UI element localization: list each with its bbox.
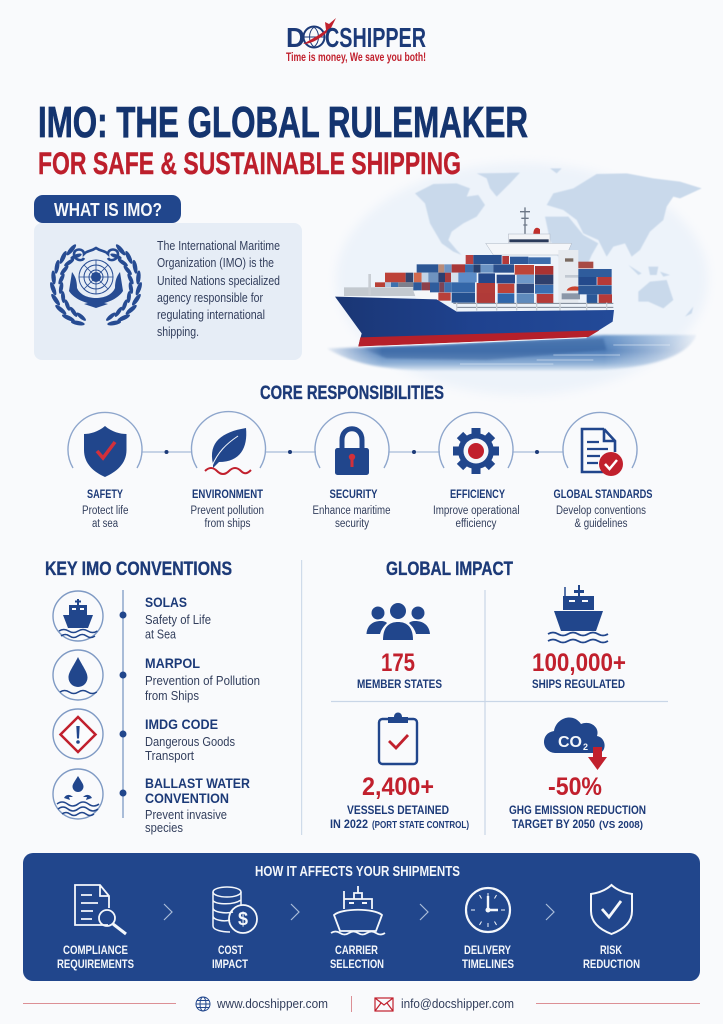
logo: DocShipper: D <box>286 22 305 53</box>
grid lines <box>331 590 668 835</box>
item: efficiency <box>433 412 520 530</box>
stat: member states: MEMBER STATES <box>357 677 442 691</box>
logo: DocShipper: CSHIPPER <box>325 22 426 53</box>
text block: description: The International Maritime <box>157 239 280 253</box>
item: carrier selection: SELECTION <box>330 957 384 971</box>
pill heading: WHAT IS IMO? <box>54 200 162 220</box>
item: cost impact: $ <box>238 909 248 929</box>
stat: member states: 175 <box>381 649 415 677</box>
icon: IMO emblem <box>49 243 143 326</box>
stat: member states <box>357 603 442 691</box>
item: security <box>312 412 390 530</box>
item: compliance requirements <box>57 885 134 971</box>
connectors between core icons <box>142 450 563 454</box>
convention: ballast water <box>53 769 250 835</box>
world map <box>415 168 702 317</box>
convention: SOLAS: SOLAS <box>145 594 187 610</box>
stat: GHG emission reduction: GHG EMISSION REDUCTION <box>509 803 646 817</box>
timeline <box>120 590 126 818</box>
convention: SOLAS <box>53 591 211 642</box>
item: carrier selection: CARRIER <box>335 943 378 957</box>
stat: GHG emission reduction <box>509 718 646 831</box>
section divider <box>301 560 302 835</box>
pill heading <box>34 195 181 223</box>
title: FOR SAFE & SUSTAINABLE SHIPPING <box>38 145 461 181</box>
arrow <box>420 904 428 920</box>
convention: IMDG code: Transport <box>145 749 194 763</box>
text block: description: Organization (IMO) is the <box>157 256 274 270</box>
stat: ships regulated: 100,000+ <box>532 649 626 677</box>
arrow <box>546 904 554 920</box>
convention: IMDG code <box>53 709 235 763</box>
item: safety <box>68 412 142 530</box>
item: efficiency: EFFICIENCY <box>450 487 505 501</box>
item: global standards: & guidelines <box>574 518 628 530</box>
icon: gear <box>453 428 499 474</box>
logo: DocShipper <box>286 18 426 64</box>
item: security: SECURITY <box>330 487 378 501</box>
panel: how it affects your shipments <box>23 853 700 981</box>
item: safety: Protect life <box>82 505 128 517</box>
stat: GHG emission reduction: -50% <box>548 773 602 801</box>
item: delivery timelines <box>462 888 514 971</box>
stat: vessels detained <box>330 712 469 831</box>
convention: IMDG code: IMDG CODE <box>145 716 218 732</box>
footer: info@docshipper.com <box>401 997 514 1011</box>
item: environment <box>190 412 266 530</box>
item: cost impact: COST <box>218 943 243 957</box>
stat: GHG emission reduction: 2 <box>583 742 588 752</box>
item: environment: from ships <box>204 518 251 530</box>
footer: www.docshipper.com <box>216 997 328 1011</box>
convention: MARPOL: Prevention of Pollution <box>145 674 260 688</box>
item: environment: Prevent pollution <box>190 505 264 517</box>
heading: KEY IMO CONVENTIONS <box>45 559 232 580</box>
item: safety: at sea <box>92 518 119 530</box>
icon: document with check <box>582 429 623 476</box>
item: safety: SAFETY <box>87 487 123 501</box>
title: IMO: THE GLOBAL RULEMAKER <box>38 99 528 147</box>
item: efficiency: Improve operational <box>433 505 520 517</box>
arrow <box>164 904 172 920</box>
item: risk reduction: RISK <box>600 943 622 957</box>
convention: IMDG code: Dangerous Goods <box>145 735 235 749</box>
item: delivery timelines: TIMELINES <box>462 957 514 971</box>
text block: description: United Nations specialized <box>157 274 280 288</box>
text block: description <box>157 239 280 339</box>
heading: core responsibilities: CORE RESPONSIBILITIES <box>260 383 444 404</box>
stat: vessels detained: 2,400+ <box>362 773 434 801</box>
arrow <box>291 904 299 920</box>
panel: global impact <box>330 559 668 835</box>
convention: ballast water: CONVENTION <box>145 790 229 806</box>
convention: MARPOL: from Ships <box>145 689 199 703</box>
item: compliance requirements: COMPLIANCE <box>63 943 128 957</box>
item: risk reduction <box>583 885 640 971</box>
item: security: security <box>335 518 369 530</box>
item: global standards: GLOBAL STANDARDS <box>554 487 652 501</box>
footer <box>23 996 700 1012</box>
stat: GHG emission reduction: CO <box>558 734 582 751</box>
stat: ships regulated: SHIPS REGULATED <box>532 677 625 691</box>
item: compliance requirements: REQUIREMENTS <box>57 957 134 971</box>
text block: description: shipping. <box>157 325 199 339</box>
panel: what is IMO <box>34 195 302 360</box>
icon: padlock <box>335 429 369 475</box>
convention: ballast water: Prevent invasive <box>145 808 227 822</box>
convention: MARPOL <box>53 650 260 703</box>
icon: envelope <box>375 998 393 1011</box>
text block: description: regulating international <box>157 308 265 322</box>
icon: leaf and wave <box>205 428 251 474</box>
item: cost impact <box>212 887 257 971</box>
logo: DocShipper: Time is money, We save you both! <box>286 50 426 64</box>
icon: shield <box>84 426 126 477</box>
convention: SOLAS: at Sea <box>145 628 176 642</box>
ship <box>335 207 614 347</box>
convention: ballast water: BALLAST WATER <box>145 775 250 791</box>
title <box>38 99 528 181</box>
panel: key IMO conventions <box>45 559 260 835</box>
stat: vessels detained: VESSELS DETAINED <box>347 803 449 817</box>
item: efficiency: efficiency <box>456 518 497 530</box>
convention: ballast water: species <box>145 821 183 835</box>
item: carrier selection <box>330 886 385 971</box>
item: security: Enhance maritime <box>312 505 390 517</box>
panel background <box>34 223 302 360</box>
stat: ships regulated <box>532 585 626 691</box>
illustration: ship on world map <box>327 163 708 395</box>
convention: MARPOL: MARPOL <box>145 655 200 671</box>
heading: HOW IT AFFECTS YOUR SHIPMENTS <box>255 863 460 880</box>
heading: GLOBAL IMPACT <box>386 559 513 580</box>
item: environment: ENVIRONMENT <box>192 487 264 501</box>
item: delivery timelines: DELIVERY <box>464 943 511 957</box>
globe backdrop <box>336 163 708 395</box>
item: risk reduction: REDUCTION <box>583 957 640 971</box>
text block: description: agency responsible for <box>157 291 263 305</box>
stat: vessels detained: IN 2022 <box>330 817 368 831</box>
item: cost impact: IMPACT <box>212 957 249 971</box>
stat: vessels detained: (PORT STATE CONTROL) <box>372 820 469 831</box>
item: global standards: Develop conventions <box>556 505 646 517</box>
convention: SOLAS: Safety of Life <box>145 613 211 627</box>
item: global standards <box>554 412 652 530</box>
stat: GHG emission reduction: (VS 2008) <box>599 820 643 831</box>
water <box>327 335 697 371</box>
icon: globe <box>196 997 210 1011</box>
stat: GHG emission reduction: TARGET BY 2050 <box>512 817 595 831</box>
